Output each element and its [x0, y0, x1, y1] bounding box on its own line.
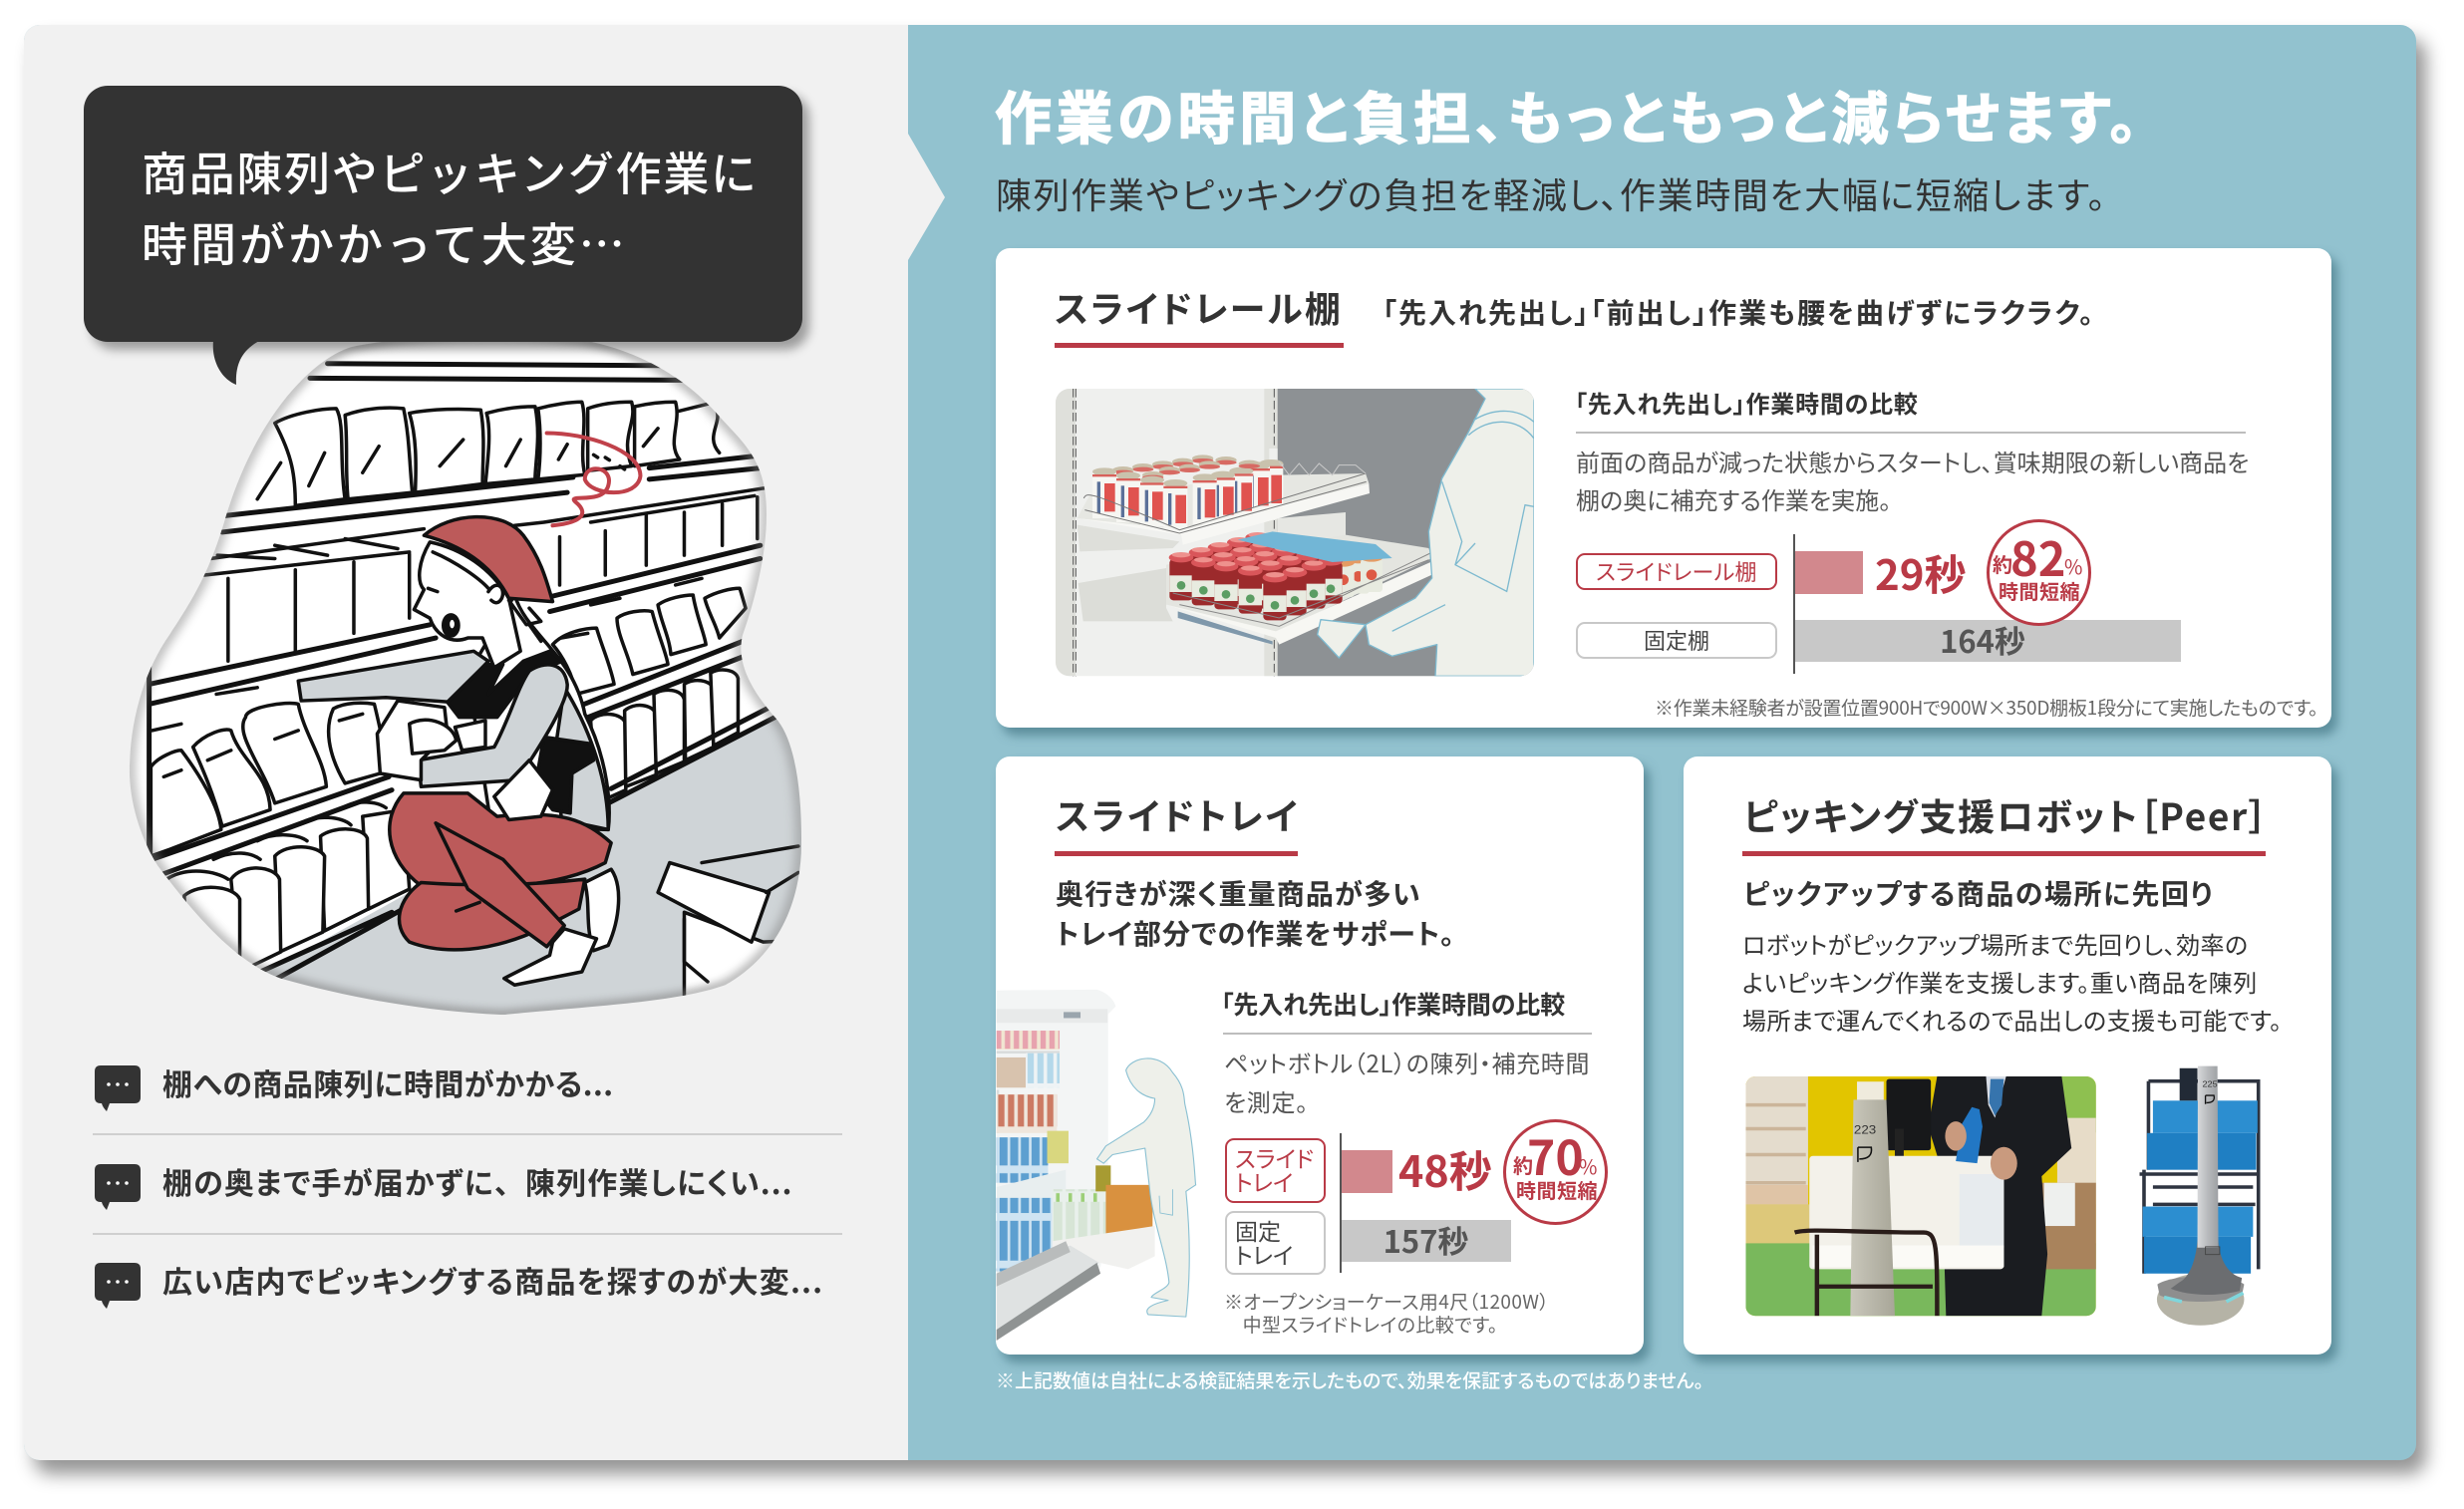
blue arrow: [1238, 531, 1392, 562]
robot cutout: [2140, 1066, 2259, 1326]
tagline: ピックアップする商品の場所に先回り: [1743, 873, 2214, 913]
heading: ピッキング支援ロボット［Peer］: [1743, 787, 2269, 841]
worry squiggle: [547, 433, 640, 525]
floor: [266, 720, 801, 1015]
card: slide rail shelf: [996, 248, 2331, 728]
label: slide tray: トレイ: [1235, 1164, 1293, 1198]
description: [1224, 1045, 1590, 1118]
description: を測定。: [1224, 1082, 1309, 1118]
cardboard box: [656, 861, 774, 997]
row 2 boxes: [228, 497, 758, 661]
man in suit: [1928, 1076, 2071, 1316]
text: 広い店内でピッキングする商品を探すのが大変...: [162, 1258, 823, 1302]
tagline: 奥行きが深く重量商品が多い: [1056, 873, 1421, 913]
person outline: [1097, 1058, 1196, 1317]
inner shading of the blob: [130, 336, 801, 1015]
person: [1318, 389, 1534, 676]
crate: [1809, 1156, 2003, 1269]
description: 場所まで運んでくれるので品出しの支援も可能です。: [1742, 1002, 2282, 1037]
hands: [1945, 1121, 1967, 1151]
footnote: 中型スライドトレイの比較です。: [1243, 1311, 1498, 1338]
card: slide rail shelf: %: [2064, 551, 2082, 580]
bar: slide rail: [1794, 551, 1863, 594]
upper shelf: [1078, 473, 1369, 531]
shelf A: [222, 456, 761, 532]
head scarf: [424, 517, 552, 602]
bar: fixed: 164秒: [1940, 617, 2025, 662]
label: fixed tray: トレイ: [1235, 1237, 1293, 1271]
description: よいピッキング作業を支援します。重い商品を陳列: [1742, 964, 2258, 999]
speech bubble: [84, 86, 815, 385]
label: fixed shelf: [1576, 622, 1777, 659]
footnote: ※作業未経験者が設置位置900Hで900W×350D棚板1段分にて実施したものです。: [1655, 694, 2317, 721]
face: [414, 542, 520, 668]
description: 棚の奥に補充する作業を実施。: [1576, 481, 1891, 516]
cart: [1795, 1231, 1937, 1316]
badge: 70%: [1503, 1119, 1608, 1225]
bar value 48: 48秒: [1398, 1138, 1492, 1200]
comparison heading: 「先入れ先出し」作業時間の比較: [1221, 986, 1565, 1022]
card: slide rail shelf: 82: [2010, 521, 2065, 590]
label: fixed tray: 固定: [1235, 1213, 1281, 1247]
icon: chat bubble: [95, 1065, 141, 1111]
bubble text: [142, 139, 759, 275]
bubble text: 商品陳列やピッキング作業に: [142, 139, 759, 204]
comparison heading: 「先入れ先出し」作業時間の比較: [1575, 385, 1919, 420]
card: slide rail shelf: 時間短縮: [1999, 576, 2080, 605]
monitor: [1886, 1079, 1931, 1150]
description: ペットボトル（2L）の陳列・補充時間: [1224, 1045, 1590, 1079]
card: slide tray: 時間短縮: [1516, 1175, 1598, 1204]
photo: slide rail shelf with cans and jars: [1056, 389, 1534, 676]
tagline: [1056, 873, 1455, 953]
description: 前面の商品が減った状態からスタートし、賞味期限の新しい商品を: [1576, 444, 2249, 478]
worry item 1: [95, 1060, 614, 1111]
photos: robot: 223: [1854, 1123, 1876, 1137]
badge: 82%: [1987, 519, 2091, 626]
card: slide tray: 70: [1527, 1119, 1584, 1189]
main title: 作業の時間と負担、もっともっと減らせます。: [995, 74, 2142, 155]
row 3 bags: [151, 588, 746, 856]
axis: [1793, 534, 1795, 674]
description: [1742, 926, 2282, 1037]
card: slide tray: %: [1579, 1151, 1597, 1180]
tagline: トレイ部分での作業をサポート。: [1056, 913, 1455, 953]
bar: fixed: [1341, 1220, 1511, 1262]
bubble text: 時間がかかって大変…: [142, 209, 628, 275]
top shelf lines: [310, 364, 684, 380]
worry item 3: [95, 1258, 823, 1309]
tagline: 「先入れ先出し」「前出し」作業も腰を曲げずにラクラク。: [1383, 292, 2095, 332]
bar: fixed: 157秒: [1384, 1217, 1468, 1262]
photos: robot: 225: [2202, 1079, 2218, 1088]
photo: showcase and person: [997, 990, 1196, 1341]
footnote: [1224, 1288, 1549, 1338]
icon: chat bubble: [95, 1164, 141, 1210]
arrow notch: [908, 134, 945, 260]
label: fixed tray: [1225, 1211, 1326, 1275]
label: slide rail: [1576, 553, 1777, 590]
stock in hands: [377, 701, 448, 780]
bar: slide tray: [1341, 1150, 1392, 1193]
card: slide tray: [996, 756, 1644, 1355]
pole: [1850, 1099, 1895, 1316]
card: slide tray: 約: [1513, 1150, 1533, 1179]
label: fixed shelf: 固定棚: [1644, 624, 1709, 656]
icon: chat bubble: [95, 1263, 141, 1309]
label: slide tray: [1225, 1138, 1326, 1203]
bubble tail: [213, 342, 257, 385]
text: 棚の奥まで手が届かずに、陳列作業しにくい...: [162, 1159, 793, 1203]
card: picking robot: [1684, 756, 2331, 1355]
label: slide tray: スライド: [1235, 1140, 1314, 1174]
lower shelf: [1166, 535, 1432, 635]
subtitle: 陳列作業やピッキングの負担を軽減し、作業時間を大幅に短縮します。: [996, 167, 2107, 219]
description: [1576, 444, 2249, 516]
shelf D: [260, 706, 774, 980]
bubble body: [84, 86, 802, 342]
shelf C: [153, 641, 749, 876]
store photo: [1745, 1076, 2097, 1317]
left panel: worries: [24, 25, 908, 1460]
footnote: ※オープンショーケース用4尺（1200W）: [1224, 1288, 1549, 1315]
label: slide rail: スライドレール棚: [1596, 555, 1757, 587]
photos: robot: [1745, 1066, 2261, 1326]
axis: [1340, 1133, 1342, 1273]
text: 棚への商品陳列に時間がかかる...: [162, 1060, 614, 1104]
bar value 29: 29秒: [1875, 542, 1967, 603]
worry list: [93, 1060, 842, 1309]
cylinders: [184, 670, 738, 975]
bottle: [1956, 1107, 1983, 1163]
shelf B: [150, 545, 761, 853]
heading: スライドレール棚: [1055, 281, 1343, 333]
bottom disclaimer: ※上記数値は自社による検証結果を示したもので、効果を保証するものではありません。: [996, 1366, 1703, 1393]
card: slide rail shelf: 約: [1993, 549, 2012, 578]
illustration: worker stocking shelves: [130, 342, 801, 1015]
heading: スライドトレイ: [1056, 788, 1301, 840]
worker: [298, 517, 619, 985]
worry item 2: [95, 1159, 793, 1210]
description: ロボットがピックアップ場所まで先回りし、効率の: [1742, 926, 2249, 961]
top row bags: [275, 402, 720, 505]
